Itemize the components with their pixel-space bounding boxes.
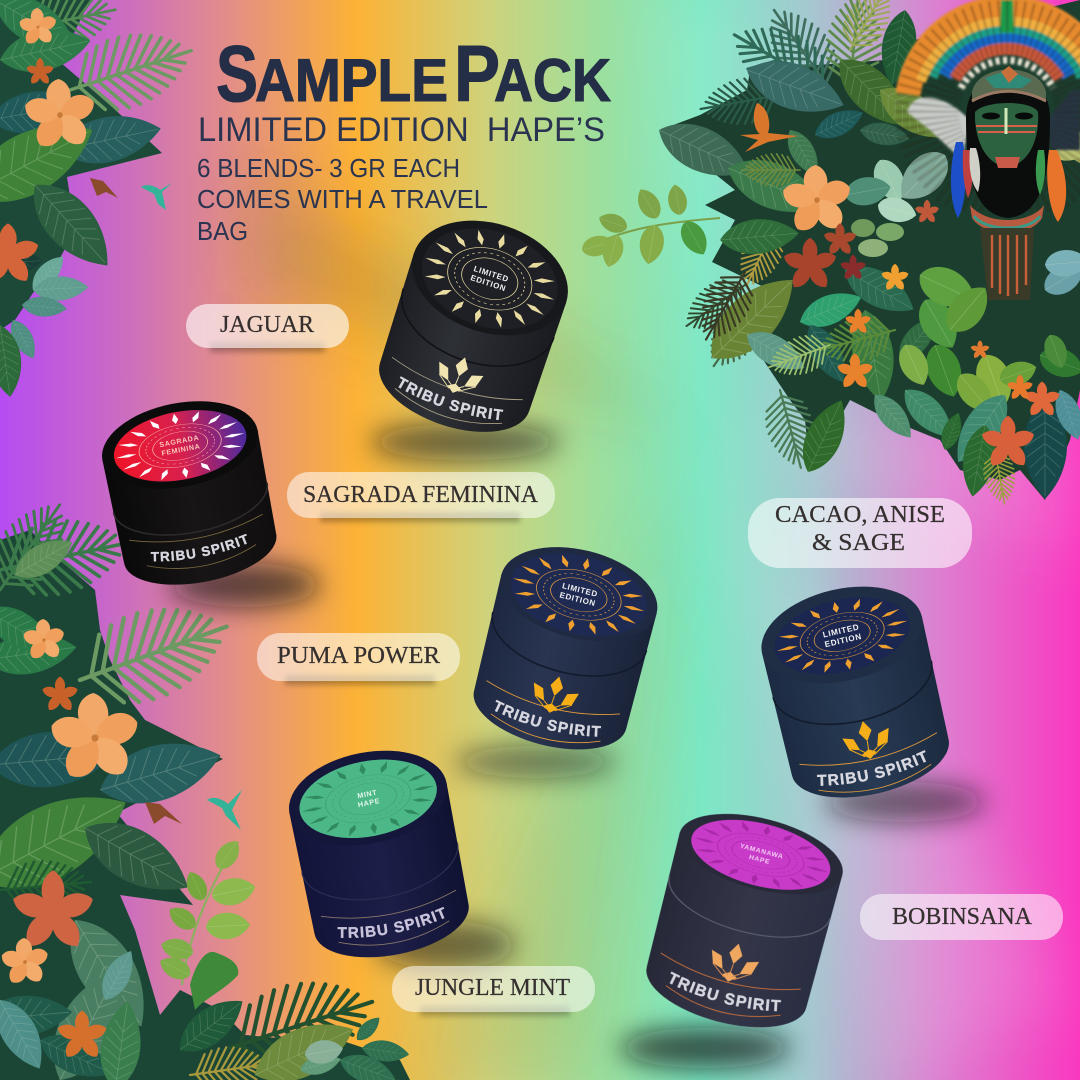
- foliage: top right cluster: [579, 0, 1080, 506]
- title: Sample Pack: ACK: [494, 47, 611, 114]
- label: Puma Power: [257, 633, 460, 685]
- jar: jungle mint: HAPE: [357, 796, 381, 809]
- text block: pack details: COMES WITH A TRAVEL: [197, 184, 488, 214]
- jar: cacao anise sage: EDITION: [824, 632, 863, 649]
- jar: sagrada feminina: FEMININA: [161, 442, 201, 458]
- label: Jaguar: JAGUAR: [220, 312, 314, 338]
- heading: limited edition hapes: LIMITED EDITION HAPE’S: [198, 111, 605, 149]
- label: Jaguar: [186, 304, 349, 352]
- label: Cacao, Anise and Sage: & SAGE: [812, 530, 905, 556]
- title: Sample Pack: [216, 29, 611, 118]
- necklace: [970, 205, 1044, 233]
- palms behind: [675, 0, 903, 474]
- foliage: top left cluster: [0, 0, 202, 399]
- title: Sample Pack: P: [454, 29, 500, 118]
- jar: sagrada feminina: [102, 401, 276, 585]
- orange bird: [740, 103, 798, 152]
- text block: pack details: 6 BLENDS- 3 GR EACH: [197, 153, 460, 183]
- label: Cacao, Anise and Sage: CACAO, ANISE: [775, 502, 945, 528]
- text block: pack details: BAG: [197, 216, 248, 246]
- label: Bobinsana: BOBINSANA: [892, 904, 1033, 930]
- foliage: bottom left cluster: [0, 488, 411, 1080]
- label: Jungle Mint: [392, 966, 595, 1016]
- sprig left: [579, 183, 720, 269]
- jar: bobinsana: HAPE: [748, 854, 771, 866]
- jar: cacao anise sage: LIMITED: [822, 622, 860, 640]
- label: Cacao, Anise and Sage: [748, 498, 972, 568]
- text block: pack details: [197, 153, 488, 246]
- jar: puma power: TRIBU SPIRIT: [494, 700, 602, 737]
- yellow fern and olive leaf: [687, 217, 810, 375]
- label: Sagrada Feminina: [287, 472, 555, 522]
- jar: black limited edition: EDITION: [469, 273, 507, 293]
- label: Puma Power: PUMA POWER: [277, 643, 440, 669]
- jar: black limited edition: TRIBU SPIRIT: [398, 376, 504, 420]
- label: Sagrada Feminina: SAGRADA FEMININA: [303, 482, 539, 508]
- jar: puma power: [474, 547, 658, 750]
- headdress: [907, 0, 1080, 192]
- green sprig: [156, 835, 258, 1010]
- label: Jungle Mint: JUNGLE MINT: [415, 975, 570, 1001]
- jar: puma power: EDITION: [559, 591, 597, 608]
- jar: black limited edition: LIMITED: [473, 264, 510, 284]
- jar: puma power: LIMITED: [561, 581, 599, 599]
- jar: jungle mint: MINT: [356, 788, 378, 800]
- jar: sagrada feminina: TRIBU SPIRIT: [150, 534, 247, 562]
- icon: hummingbird and moth left: [90, 178, 242, 830]
- jar shadows: [170, 424, 985, 1068]
- label: Bobinsana: [860, 894, 1063, 940]
- jar: jungle mint: [289, 750, 469, 958]
- jar: bobinsana: [646, 814, 844, 1028]
- title: Sample Pack: S: [216, 29, 258, 118]
- title: Sample Pack: AMPLE: [255, 47, 448, 114]
- jar: cacao anise sage: TRIBU SPIRIT: [816, 750, 926, 786]
- jar: bobinsana: TRIBU SPIRIT: [670, 972, 782, 1012]
- jar: black limited edition: [379, 220, 568, 432]
- side feathers: [951, 142, 966, 218]
- jar: jungle mint: TRIBU SPIRIT: [338, 906, 444, 938]
- jar: bobinsana: YAMANAWA: [739, 843, 784, 861]
- jar: sagrada feminina: SAGRADA: [159, 434, 200, 449]
- head and face: [966, 73, 1050, 218]
- background: soft light rays: [250, 0, 1080, 1080]
- icon: feathered chief portrait: [907, 0, 1080, 300]
- jar: cacao anise sage: [761, 586, 949, 798]
